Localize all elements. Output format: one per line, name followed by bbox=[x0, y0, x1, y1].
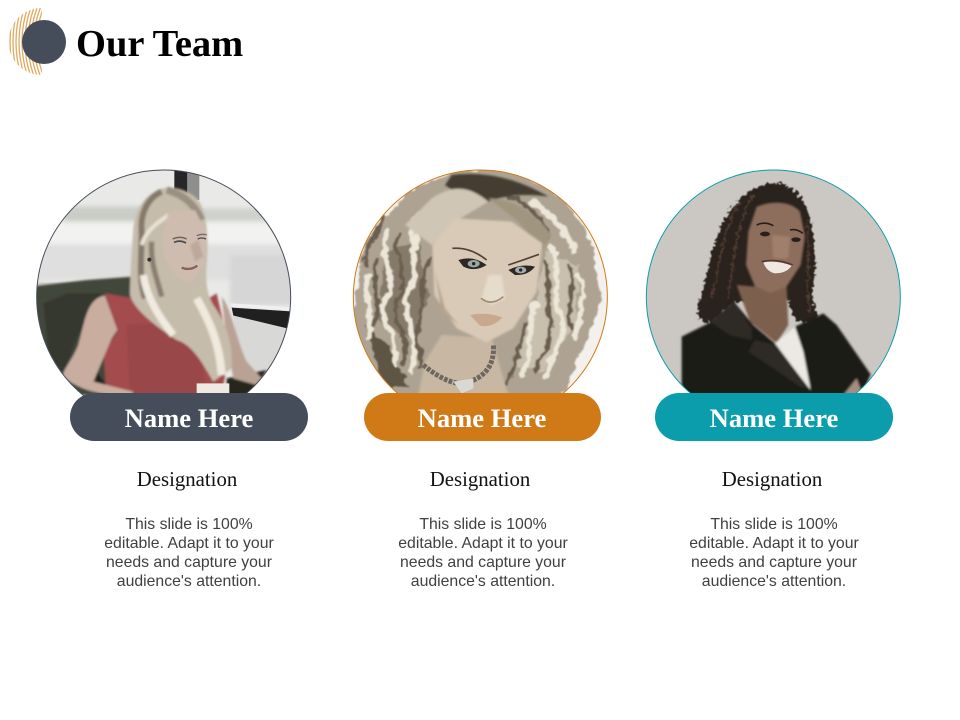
description: This slide is 100% bbox=[710, 516, 838, 533]
name pill bbox=[655, 393, 893, 441]
photo: smiling woman in dark blazer bbox=[646, 170, 901, 393]
name pill: Name Here bbox=[125, 403, 254, 433]
photo: woman in red dress by a window bbox=[36, 170, 292, 396]
description: This slide is 100% bbox=[125, 516, 253, 533]
description: needs and capture your bbox=[691, 554, 857, 571]
name pill bbox=[70, 393, 308, 441]
panel: team member 2 bbox=[345, 165, 612, 590]
description: needs and capture your bbox=[106, 554, 272, 571]
description: audience's attention. bbox=[702, 573, 846, 590]
description: editable. Adapt it to your bbox=[104, 535, 274, 552]
panel: team member 3 bbox=[640, 165, 907, 590]
description: audience's attention. bbox=[411, 573, 555, 590]
panel: team member 1 bbox=[30, 165, 308, 590]
designation: Designation bbox=[137, 468, 238, 491]
photo: woman with curly blonde hair bbox=[352, 170, 608, 393]
description: editable. Adapt it to your bbox=[398, 535, 568, 552]
name pill bbox=[364, 393, 601, 441]
name pill: Name Here bbox=[710, 403, 839, 433]
name pill: Name Here bbox=[418, 403, 547, 433]
icon: striped circle logo bbox=[9, 8, 66, 75]
title: Our Team bbox=[76, 23, 243, 65]
designation: Designation bbox=[430, 468, 531, 491]
description: This slide is 100% bbox=[419, 516, 547, 533]
description: needs and capture your bbox=[400, 554, 566, 571]
description: editable. Adapt it to your bbox=[689, 535, 859, 552]
description: audience's attention. bbox=[117, 573, 261, 590]
designation: Designation bbox=[722, 468, 823, 491]
